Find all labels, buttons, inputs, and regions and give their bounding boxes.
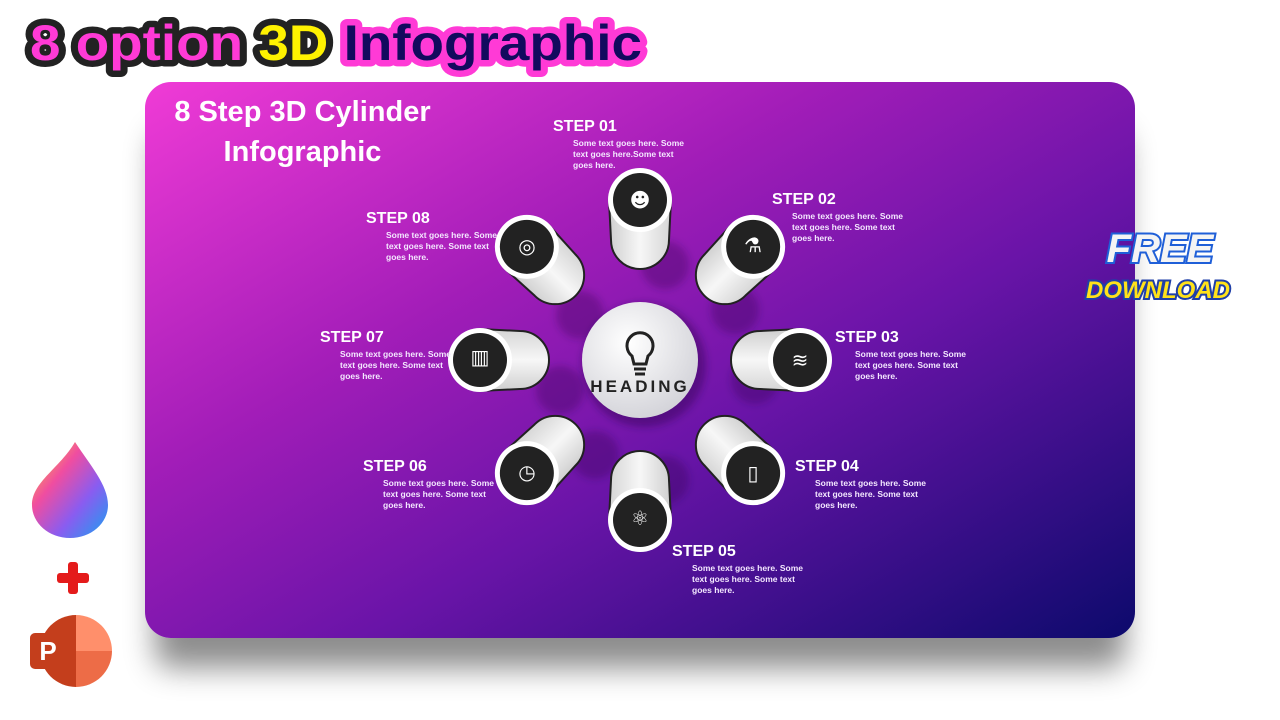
step 01: Some text goes here. Some text goes here.Some text goes here. bbox=[573, 138, 684, 170]
step 06: STEP 06 bbox=[363, 458, 427, 475]
step 04: STEP 04 bbox=[795, 458, 859, 475]
step 03: STEP 03 bbox=[835, 329, 899, 346]
step 07: Some text goes here. Some text goes here. Some text goes here. bbox=[340, 349, 451, 381]
step 03: Some text goes here. Some text goes here. Some text goes here. bbox=[855, 349, 966, 381]
step 06 bbox=[363, 458, 494, 510]
card title bbox=[174, 96, 431, 168]
step 08 bbox=[366, 210, 497, 262]
step 02 bbox=[772, 191, 903, 243]
step icons: ◎ bbox=[518, 234, 536, 258]
step 05 bbox=[672, 543, 803, 595]
step icons: ≋ bbox=[792, 348, 808, 372]
step icons: ▯ bbox=[747, 461, 759, 485]
step 01: STEP 01 bbox=[553, 118, 617, 135]
step 01 bbox=[553, 118, 684, 170]
step 02: STEP 02 bbox=[772, 191, 836, 208]
step 07: STEP 07 bbox=[320, 329, 384, 346]
step 05: STEP 05 bbox=[672, 543, 736, 560]
step 03 bbox=[835, 329, 966, 381]
step icons bbox=[471, 188, 808, 530]
step icons: ⚗ bbox=[744, 233, 762, 257]
step icons: ⚛ bbox=[631, 506, 649, 530]
step icons: ☻ bbox=[630, 188, 650, 212]
step 08: STEP 08 bbox=[366, 210, 430, 227]
card title: 8 Step 3D Cylinder bbox=[174, 96, 431, 128]
icon: powerpoint bbox=[30, 615, 112, 687]
icon: plus bbox=[57, 562, 89, 594]
card panel bbox=[145, 82, 1135, 638]
free download badge: DOWNLOAD bbox=[1086, 277, 1230, 304]
card title: Infographic bbox=[224, 136, 381, 168]
heading hub bbox=[582, 302, 706, 427]
cylinders bbox=[448, 168, 832, 552]
step icons: ▥ bbox=[471, 345, 489, 369]
step 04 bbox=[795, 458, 926, 510]
free download badge bbox=[1084, 227, 1232, 304]
step 05: Some text goes here. Some text goes here. Some text goes here. bbox=[692, 563, 803, 595]
step 02: Some text goes here. Some text goes here. Some text goes here. bbox=[792, 211, 903, 243]
step icons: ◷ bbox=[518, 460, 536, 484]
step 04: Some text goes here. Some text goes here. Some text goes here. bbox=[815, 478, 926, 510]
icon: powerpoint: P bbox=[39, 636, 57, 666]
free download badge: FREE bbox=[1107, 227, 1215, 271]
icon: paint app logo bbox=[32, 442, 108, 538]
shadows bbox=[536, 241, 779, 504]
step 07 bbox=[320, 329, 451, 381]
main title: 8 option 3D Infographic bbox=[30, 15, 642, 71]
heading hub: HEADING bbox=[590, 377, 690, 396]
step 08: Some text goes here. Some text goes here. Some text goes here. bbox=[386, 230, 497, 262]
step 06: Some text goes here. Some text goes here. Some text goes here. bbox=[383, 478, 494, 510]
